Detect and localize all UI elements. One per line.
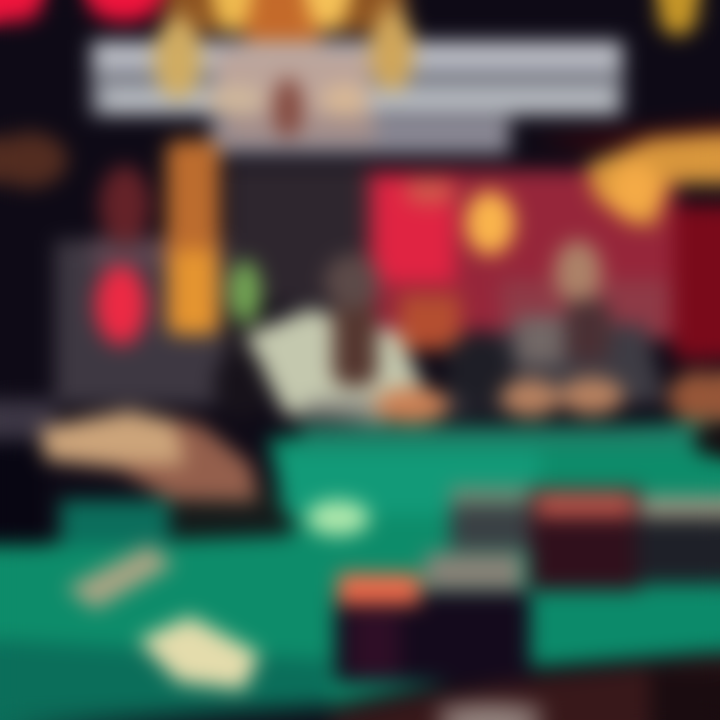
panel: dealer in white shirt <box>214 254 450 423</box>
icon: gold crown ornament <box>154 0 414 138</box>
panel: red backdrop <box>366 170 720 360</box>
icon: playing cards on felt <box>66 500 370 690</box>
panel: foreground hand and sleeve <box>0 400 298 545</box>
panel: gold pillar and red lamp <box>95 140 261 345</box>
chart: chip stacks <box>335 486 720 682</box>
panel: green felt table <box>0 422 720 720</box>
panel: player in dark suit <box>446 240 720 456</box>
icon: gold lights on right <box>465 118 720 255</box>
icon: top lights <box>0 0 698 188</box>
panel: upper wall <box>55 165 366 410</box>
panel: table edge <box>330 658 720 720</box>
heading: blurred title band <box>90 40 624 154</box>
